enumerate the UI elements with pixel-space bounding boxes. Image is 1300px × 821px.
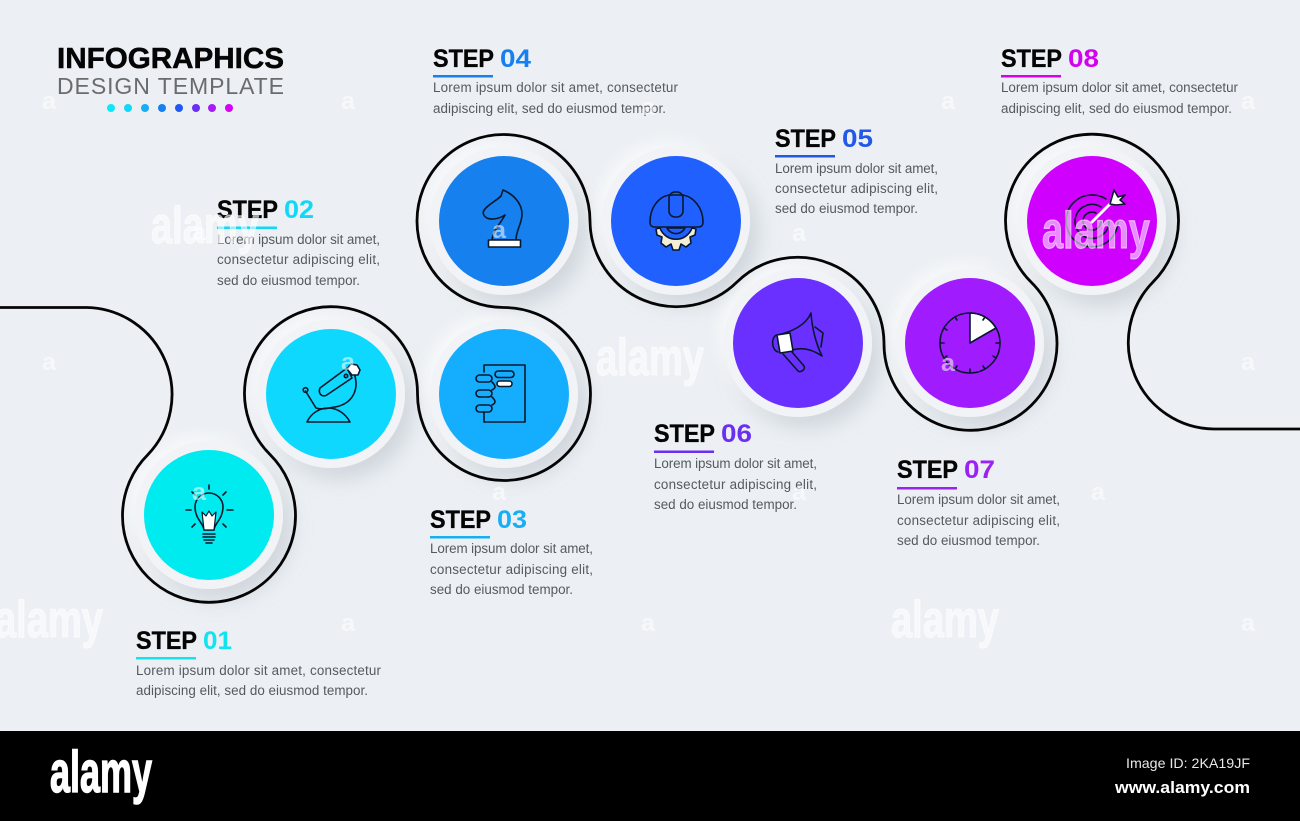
watermarks: a <box>192 219 207 246</box>
body: sed do eiusmod tempor. <box>430 582 573 597</box>
icon: microscope <box>303 364 360 422</box>
body: sed do eiusmod tempor. <box>897 533 1040 548</box>
body: sed do eiusmod tempor. <box>217 273 360 288</box>
body: consectetur adipiscing elit, <box>897 513 1060 528</box>
title block <box>57 43 284 112</box>
step 4 text <box>433 45 679 116</box>
body: Lorem ipsum dolor sit amet, consectetur <box>136 663 382 678</box>
underline <box>1001 75 1061 78</box>
underline <box>897 487 957 490</box>
heading: STEP <box>430 506 491 534</box>
watermarks: alamy <box>596 329 704 387</box>
watermarks: a <box>42 349 57 376</box>
watermarks: a <box>1241 610 1256 637</box>
heading: 03 <box>497 506 527 534</box>
icon: megaphone <box>773 313 823 372</box>
watermarks: a <box>192 479 207 506</box>
watermarks: a <box>492 479 507 506</box>
step 2 node <box>266 329 396 459</box>
watermarks: a <box>641 94 656 121</box>
icon: clock with wedge <box>940 313 1000 373</box>
winding path line <box>0 134 1300 602</box>
step 8 text <box>1001 45 1239 116</box>
step 7 node <box>905 278 1035 408</box>
step 4 node <box>439 156 569 286</box>
body: consectetur adipiscing elit, <box>654 477 817 492</box>
heading: 04 <box>500 45 531 73</box>
heading: STEP <box>136 627 197 655</box>
watermarks: a <box>941 350 956 377</box>
heading: STEP <box>897 456 958 484</box>
heading <box>1001 45 1099 73</box>
body: Lorem ipsum dolor sit amet, <box>217 232 380 247</box>
watermarks: a <box>941 88 956 115</box>
title: INFOGRAPHICS <box>57 43 284 75</box>
heading: 05 <box>842 125 873 153</box>
watermarks: alamy <box>151 197 259 255</box>
step 1 node <box>144 450 274 580</box>
watermarks: a <box>792 220 807 247</box>
body: Lorem ipsum dolor sit amet, <box>430 541 593 556</box>
watermarks: alamy <box>1042 202 1150 260</box>
watermarks: a <box>792 479 807 506</box>
step 3 text <box>430 506 593 597</box>
heading <box>430 506 527 534</box>
body: Lorem ipsum dolor sit amet, <box>775 161 938 176</box>
heading: 02 <box>284 196 314 224</box>
step 2 text <box>217 196 380 288</box>
step 6 text <box>654 420 817 512</box>
body: Lorem ipsum dolor sit amet, consectetur <box>433 80 679 95</box>
heading: STEP <box>1001 45 1062 73</box>
subtitle: DESIGN TEMPLATE <box>57 73 284 99</box>
heading: 07 <box>964 456 995 484</box>
icon: light bulb <box>186 485 233 543</box>
body: adipiscing elit, sed do eiusmod tempor. <box>136 683 368 698</box>
watermarks: alamy <box>891 591 999 649</box>
footer logo: alamy <box>50 740 152 805</box>
step 8 node <box>1027 156 1157 286</box>
heading <box>433 45 531 73</box>
icon: target with dart <box>1066 190 1125 247</box>
heading <box>136 627 232 655</box>
body: adipiscing elit, sed do eiusmod tempor. <box>1001 101 1232 116</box>
body: consectetur adipiscing elit, <box>217 252 380 267</box>
body: Lorem ipsum dolor sit amet, <box>897 492 1060 507</box>
image id: Image ID: 2KA19JF <box>1126 755 1250 771</box>
colour dots <box>107 104 233 112</box>
heading: STEP <box>654 420 715 448</box>
underline <box>217 226 277 229</box>
heading: 01 <box>203 627 232 655</box>
body: consectetur adipiscing elit, <box>775 181 938 196</box>
watermarks: a <box>341 88 356 115</box>
step 3 node <box>439 329 569 459</box>
heading <box>897 456 995 484</box>
step 7 text <box>897 456 1060 548</box>
watermarks <box>0 88 1256 649</box>
website: www.alamy.com <box>1114 778 1250 797</box>
icon: hard hat with gear <box>650 192 703 250</box>
watermarks: a <box>42 88 57 115</box>
watermarks: a <box>641 610 656 637</box>
watermarks: a <box>1241 88 1256 115</box>
heading: 06 <box>721 420 752 448</box>
heading <box>654 420 752 448</box>
watermarks: a <box>341 610 356 637</box>
underline <box>430 536 490 538</box>
step 5 node <box>611 156 741 286</box>
body: Lorem ipsum dolor sit amet, <box>654 456 817 471</box>
underline <box>136 657 196 660</box>
watermarks: a <box>492 217 507 244</box>
body: consectetur adipiscing elit, <box>430 562 593 577</box>
neumorphic discs <box>135 147 1166 589</box>
watermarks: a <box>341 349 356 376</box>
body: adipiscing elit, sed do eiusmod tempor. <box>433 101 666 116</box>
step 1 text <box>136 627 382 698</box>
heading: STEP <box>433 45 494 73</box>
step 6 node <box>733 278 863 408</box>
body: sed do eiusmod tempor. <box>654 497 797 512</box>
underline <box>775 155 835 158</box>
heading: STEP <box>775 125 836 153</box>
heading <box>217 196 314 224</box>
heading <box>775 125 873 153</box>
icon: notebook <box>476 365 525 422</box>
footer bar <box>0 731 1300 821</box>
watermarks: a <box>1241 349 1256 376</box>
icon: chess knight <box>483 190 522 247</box>
body: sed do eiusmod tempor. <box>775 201 918 216</box>
watermarks: a <box>1091 479 1106 506</box>
heading: 08 <box>1068 45 1099 73</box>
underline <box>654 450 714 453</box>
step 5 text <box>775 125 938 216</box>
underline <box>433 75 493 78</box>
body: Lorem ipsum dolor sit amet, consectetur <box>1001 80 1239 95</box>
heading: STEP <box>217 196 278 224</box>
